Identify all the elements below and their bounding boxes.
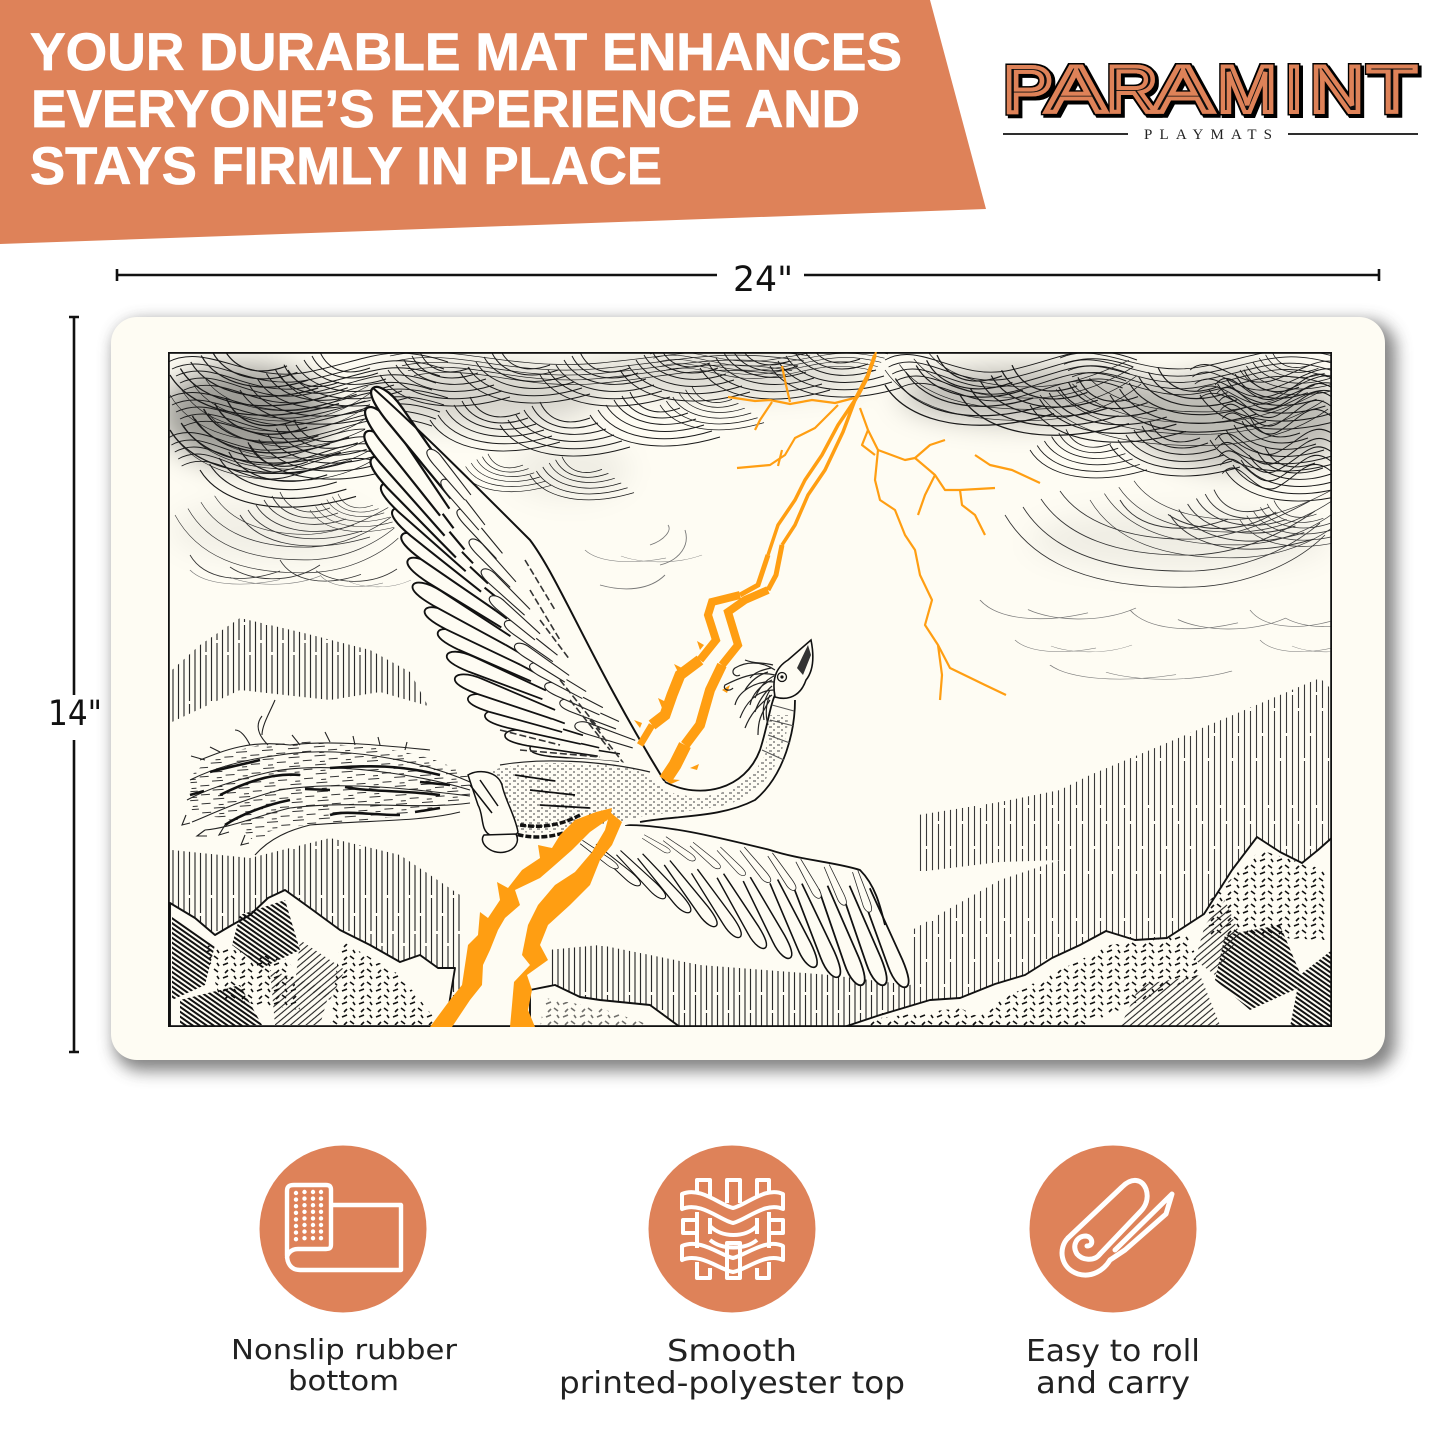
rain hatching: [172, 618, 1332, 1027]
mat shadow: [114, 321, 1396, 1071]
logo: Paramint Playmats: T: [1367, 52, 1417, 126]
label: easy to roll and carry: and carry: [1036, 1366, 1190, 1401]
mountains: [170, 835, 1335, 1030]
dimension: width 24 inches: 24": [733, 260, 793, 300]
title text: [30, 23, 902, 196]
icon: nonslip rubber bottom: [260, 1146, 426, 1312]
dimension: height 14 inches: [48, 317, 102, 1052]
lower wing: [579, 825, 913, 990]
logo: Paramint Playmats: [1003, 52, 1418, 143]
logo: Paramint Playmats: I: [1285, 52, 1303, 126]
phoenix head: [724, 640, 813, 735]
title banner: [0, 0, 986, 244]
label: smooth printed-polyester top: Smooth: [667, 1334, 797, 1369]
phoenix body and neck: [470, 695, 795, 839]
tail feathers: [182, 700, 470, 855]
mountain hatching: [172, 850, 1332, 1027]
icon: woven polyester: [648, 1146, 816, 1312]
logo: Paramint Playmats: P: [1003, 52, 1053, 126]
lightning sparks: [634, 641, 730, 784]
icon: rolled mat: [1030, 1146, 1196, 1312]
dimension: width 24 inches: [117, 260, 1379, 300]
rubber dots: [296, 1192, 321, 1242]
art frame: [168, 352, 1332, 1026]
label: smooth printed-polyester top: printed-polyester top: [559, 1366, 905, 1401]
title text: STAYS FIRMLY IN PLACE: [30, 137, 662, 196]
logo: Paramint Playmats: R: [1106, 52, 1158, 126]
label: easy to roll and carry: [1026, 1334, 1200, 1401]
lightning: upper thin branches: [728, 352, 1040, 700]
title text: EVERYONE’S EXPERIENCE AND: [31, 80, 860, 139]
label: nonslip rubber bottom: Nonslip rubber: [231, 1333, 458, 1366]
phoenix foot: [468, 772, 518, 852]
logo: Paramint Playmats: M: [1217, 52, 1277, 126]
label: nonslip rubber bottom: bottom: [288, 1364, 399, 1397]
label: easy to roll and carry: Easy to roll: [1026, 1334, 1200, 1369]
clouds: [168, 343, 1358, 507]
logo: Paramint Playmats: A: [1046, 52, 1106, 126]
label: smooth printed-polyester top: [559, 1334, 905, 1401]
title text: YOUR DURABLE MAT ENHANCES: [30, 23, 902, 82]
upper wing: [359, 381, 665, 782]
panel: playmat: [111, 317, 1385, 1060]
cloud tone: [160, 357, 1350, 570]
label: nonslip rubber bottom: [231, 1333, 458, 1397]
lightning: thick strands to wing and neck: [640, 355, 875, 780]
dimension: height 14 inches: 14": [48, 694, 102, 734]
illustration: phoenix and lightning: [160, 343, 1367, 1030]
logo: Paramint Playmats: A: [1153, 52, 1213, 126]
logo: Paramint Playmats: PLAYMATS: [1144, 127, 1272, 143]
lightning: lower bolts: [430, 808, 622, 1027]
logo: Paramint Playmats: N: [1310, 52, 1364, 126]
